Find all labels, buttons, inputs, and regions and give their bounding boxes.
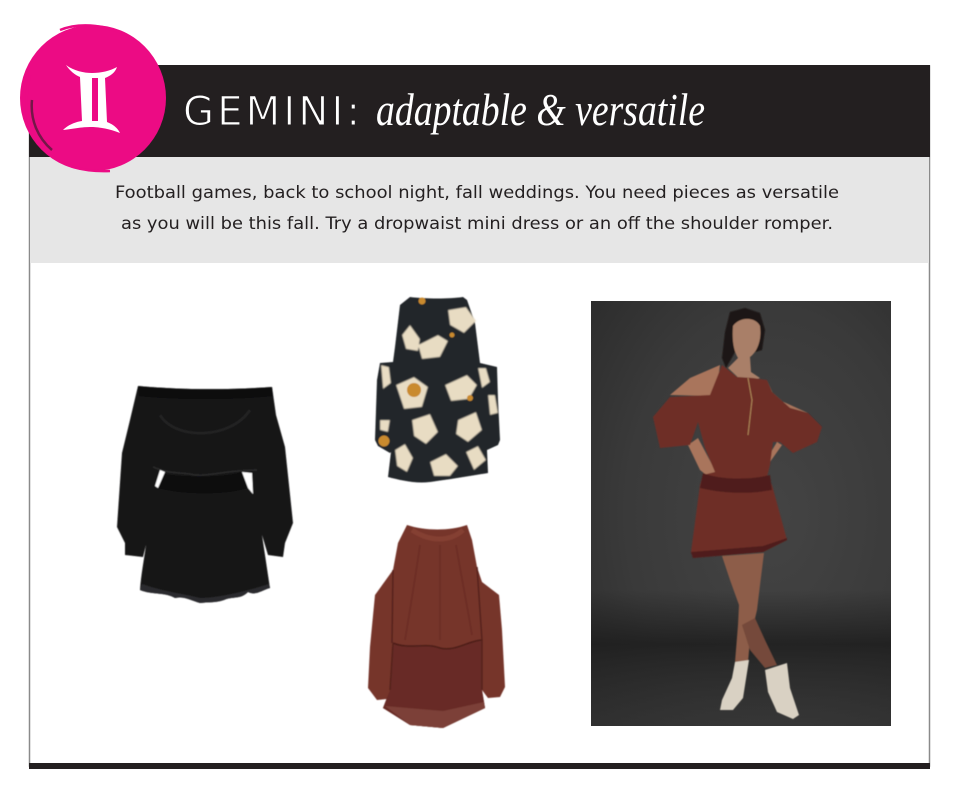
heading: Gemini: GEMINI: [183, 89, 360, 135]
header bar [29, 65, 930, 157]
heading: adaptable and versatile script: adaptable & versatile [376, 84, 705, 135]
description text: as you will be this fall. Try a dropwaist mini dress or an off the shoulder romper. [121, 214, 833, 233]
garment: black off-shoulder romper [117, 386, 293, 603]
icon: gemini zodiac badge [20, 25, 166, 171]
description panel [30, 157, 929, 263]
footer bar [29, 763, 930, 769]
model face and neck [728, 319, 760, 384]
garment: rust cold-shoulder romper [368, 525, 505, 728]
description text: Football games, back to school night, fall weddings. You need pieces as versatile [115, 183, 839, 202]
garment: floral cold-shoulder romper [375, 297, 500, 483]
model ankle boots [720, 660, 799, 719]
photo: model in rust dropwaist dress [591, 301, 891, 726]
model dress [653, 365, 822, 558]
description text [115, 183, 839, 233]
model skin: shoulders and forearms [670, 365, 808, 478]
model hair [722, 308, 765, 368]
model legs [722, 553, 764, 662]
